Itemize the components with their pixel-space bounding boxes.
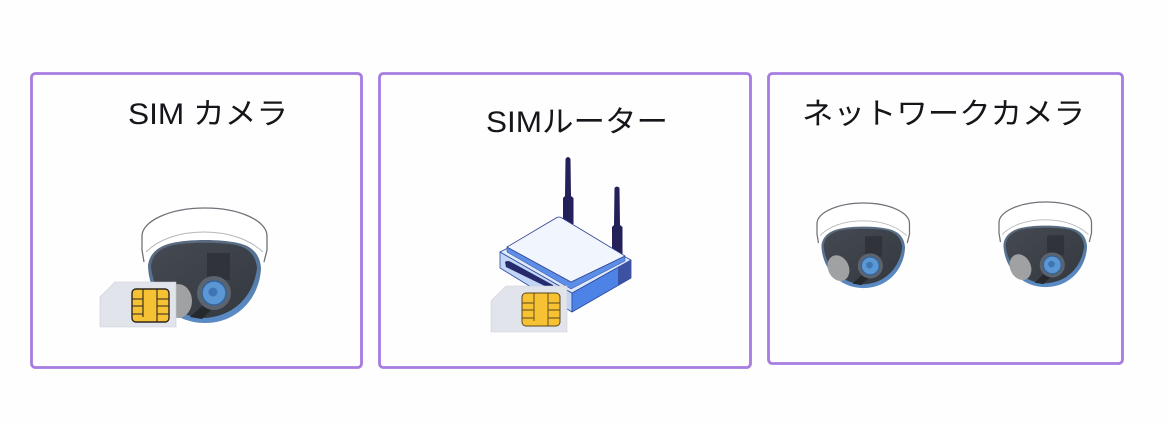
icon: dome camera left — [817, 203, 910, 288]
icon: dome camera right — [999, 202, 1092, 287]
panel: SIM camera — [32, 74, 362, 368]
icon: router — [500, 157, 631, 312]
icon: SIM card — [491, 286, 567, 332]
panel: network cameras — [768, 74, 1122, 364]
heading: SIM camera: SIM カメラ — [128, 98, 288, 131]
panel: SIM router — [380, 74, 750, 368]
icon: dome camera — [142, 208, 267, 323]
heading: network cameras: ネットワークカメラ — [802, 98, 1085, 131]
heading: SIM router: SIMルーター — [486, 106, 668, 139]
icon: SIM card — [100, 282, 176, 327]
